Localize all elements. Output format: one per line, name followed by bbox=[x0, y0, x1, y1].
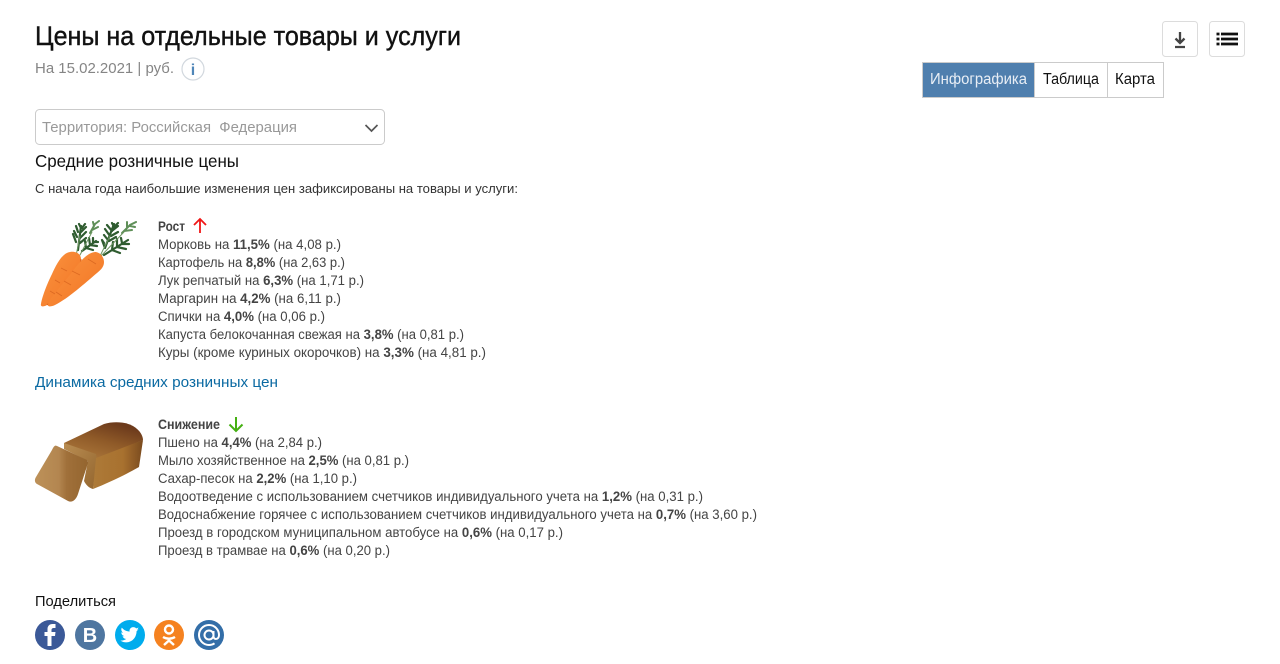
decrease item 3: Сахар-песок на 2,2% (на 1,10 р.) bbox=[158, 471, 357, 486]
tab: table: Таблица bbox=[1043, 71, 1099, 88]
icon: mail bbox=[194, 620, 224, 650]
decrease item 7: Проезд в трамвае на 0,6% (на 0,20 р.) bbox=[158, 543, 390, 558]
growth item 5: Спички на 4,0% (на 0,06 р.) bbox=[158, 309, 325, 324]
tab: infographic bbox=[923, 63, 1035, 97]
share icons bbox=[35, 620, 224, 650]
growth item 7: Куры (кроме куриных окорочков) на 3,3% (на 4,81 р.) bbox=[158, 345, 486, 360]
icon: carrots bbox=[41, 221, 136, 306]
button: list bbox=[1210, 22, 1244, 56]
icon: red up arrow bbox=[194, 219, 206, 233]
growth item 6: Капуста белокочанная свежая на 3,8% (на 0,81 р.) bbox=[158, 327, 464, 342]
view tabs bbox=[922, 62, 1164, 98]
share label: Поделиться bbox=[35, 593, 116, 610]
decrease item 5: Водоснабжение горячее с использованием счетчиков индивидуального учета на 0,7% (на 3,60 р.) bbox=[158, 507, 757, 522]
decrease heading: Снижение bbox=[158, 417, 220, 432]
icon: bread bbox=[35, 422, 143, 502]
button: download bbox=[1162, 22, 1198, 56]
icon: info: i bbox=[191, 62, 195, 79]
growth heading: Рост bbox=[158, 219, 185, 234]
icon: vk: В bbox=[83, 625, 97, 647]
icon: facebook bbox=[35, 620, 65, 650]
link: price dynamics: Динамика средних розничных цен bbox=[35, 374, 278, 391]
growth list bbox=[158, 219, 486, 360]
growth item 1: Морковь на 11,5% (на 4,08 р.) bbox=[158, 237, 341, 252]
decrease item 1: Пшено на 4,4% (на 2,84 р.) bbox=[158, 435, 322, 450]
territory dropdown: Территория: Российская Федерация bbox=[42, 119, 297, 136]
growth item 4: Маргарин на 4,2% (на 6,11 р.) bbox=[158, 291, 341, 306]
territory dropdown bbox=[36, 110, 384, 144]
decrease item 4: Водоотведение с использованием счетчиков индивидуального учета на 1,2% (на 0,31 р.) bbox=[158, 489, 703, 504]
icon: vk bbox=[75, 620, 105, 650]
icon: green down arrow bbox=[230, 417, 242, 431]
tab: map: Карта bbox=[1115, 71, 1155, 88]
icon: info bbox=[182, 58, 204, 80]
title: Цены на отдельные товары и услуги bbox=[35, 21, 461, 51]
date and unit: На 15.02.2021 | руб. bbox=[35, 60, 174, 77]
section heading: Средние розничные цены bbox=[35, 151, 239, 171]
icon: odnoklassniki bbox=[154, 620, 184, 650]
growth item 3: Лук репчатый на 6,3% (на 1,71 р.) bbox=[158, 273, 364, 288]
intro text: С начала года наибольшие изменения цен зафиксированы на товары и услуги: bbox=[35, 181, 518, 196]
growth item 2: Картофель на 8,8% (на 2,63 р.) bbox=[158, 255, 345, 270]
icon: twitter bbox=[115, 620, 145, 650]
decrease item 6: Проезд в городском муниципальном автобусе на 0,6% (на 0,17 р.) bbox=[158, 525, 563, 540]
decrease list bbox=[158, 417, 757, 558]
decrease item 2: Мыло хозяйственное на 2,5% (на 0,81 р.) bbox=[158, 453, 409, 468]
tab: infographic: Инфографика bbox=[930, 71, 1027, 88]
